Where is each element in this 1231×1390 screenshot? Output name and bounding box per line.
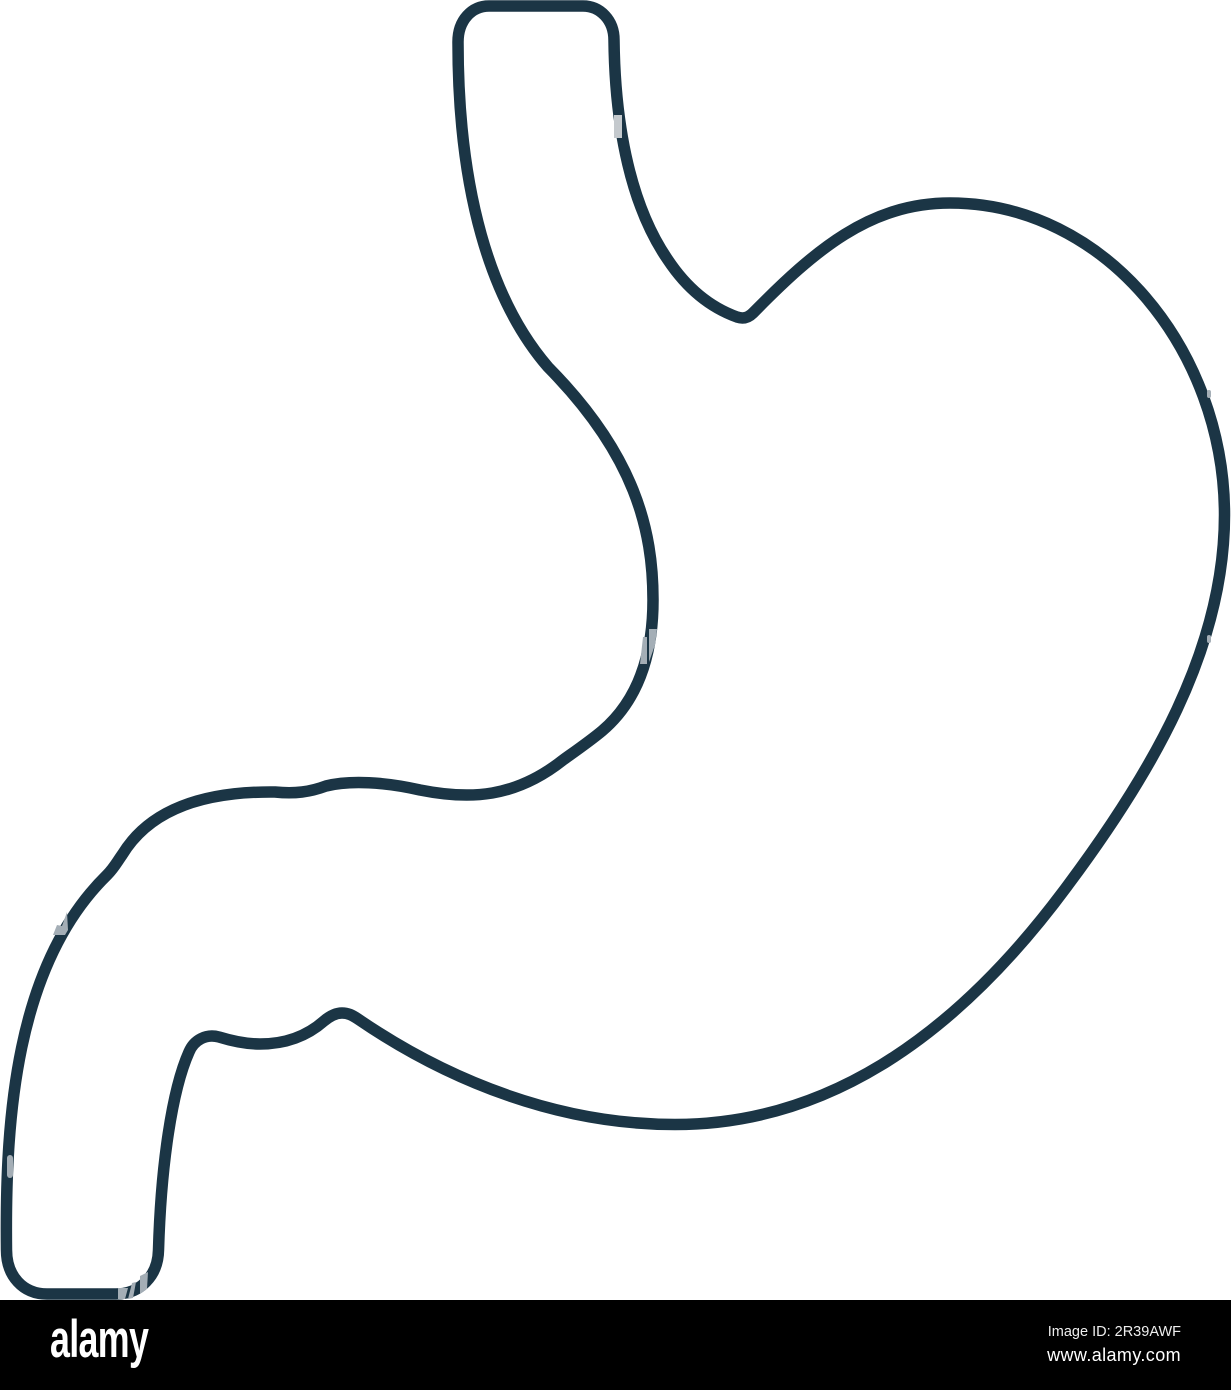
image id: Image ID: 2R39AWF: [1048, 1324, 1181, 1340]
site url: www.alamy.com: [1047, 1345, 1181, 1365]
footer bar: [0, 1300, 1231, 1390]
logo: alamy: alamy: [50, 1310, 148, 1369]
